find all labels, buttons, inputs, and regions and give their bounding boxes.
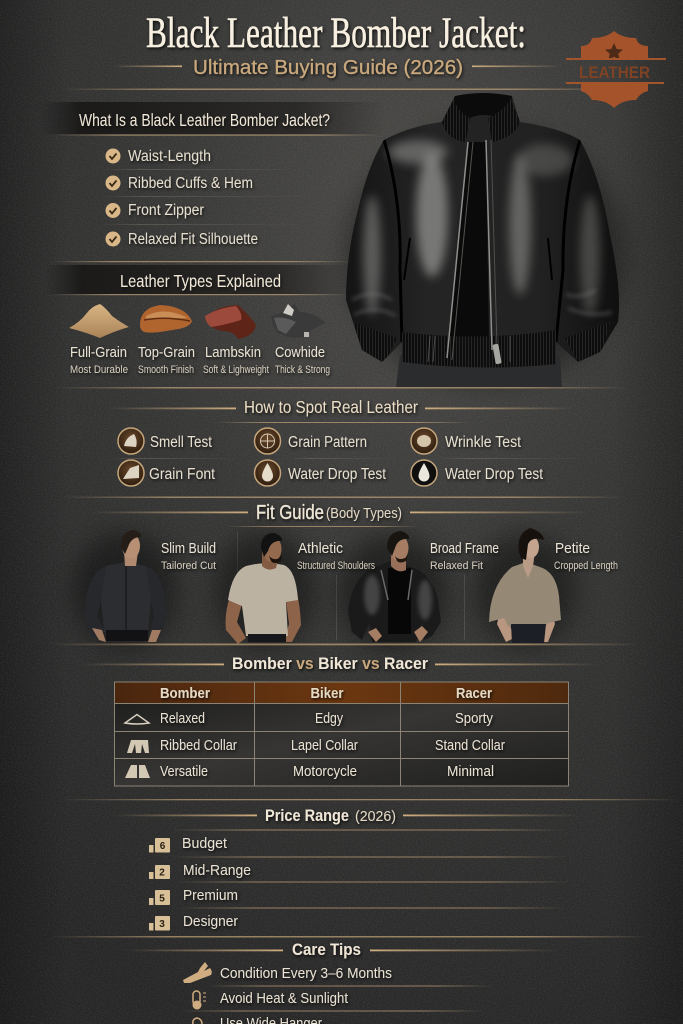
title: Black Leather Bomber Jacket: (146, 10, 526, 57)
list: features (100, 148, 310, 248)
icon: price tag 5 (149, 890, 170, 905)
icon: smell test (118, 428, 144, 454)
list: features: Waist-Length (128, 148, 211, 165)
labels: leather types: Cowhide (275, 344, 325, 361)
heading: leather types: Leather Types Explained (120, 271, 281, 291)
icon: thermometer (192, 991, 206, 1010)
table text: Bomber (160, 686, 210, 702)
labels: leather types (70, 344, 330, 376)
heading: fit guide: (Body Types) (326, 505, 402, 522)
icon: biker jacket (125, 765, 150, 778)
labels: body types: Cropped Length (554, 560, 618, 572)
badge: leather (566, 31, 666, 108)
labels: leather types: Top-Grain (138, 344, 195, 361)
icon: full-grain (69, 304, 129, 338)
labels: price tiers (182, 836, 251, 930)
list: features: Front Zipper (128, 202, 204, 219)
icon: price tag 5: 5 (159, 894, 165, 904)
labels: price tiers: Premium (183, 888, 238, 904)
labels: price tiers: Mid-Range (183, 863, 251, 879)
heading: fit guide (90, 502, 590, 527)
table text: Racer (456, 686, 492, 702)
heading: spot real leather: How to Spot Real Leather (244, 397, 418, 417)
table text: Motorcycle (293, 764, 357, 780)
icon: hanger (125, 714, 149, 724)
heading: comparison: Bomber vs Biker vs Racer (232, 654, 428, 673)
labels: tests: Water Drop Test (288, 466, 387, 483)
labels: tests (149, 434, 544, 483)
labels: body types: Relaxed Fit (430, 560, 483, 572)
panel: leather types (45, 261, 355, 376)
table text: Biker (310, 686, 344, 702)
icon: conditioning brush (183, 962, 212, 983)
labels: tests: Wrinkle Test (445, 434, 522, 451)
icon: price tag 2: 2 (159, 868, 165, 878)
badge: leather: LEATHER (579, 63, 650, 82)
labels: body types (161, 541, 618, 572)
heading: fit guide: Fit Guide (256, 502, 324, 524)
labels: tests: Grain Font (149, 466, 216, 483)
heading: care tips: Care Tips (292, 940, 361, 959)
panel: how to spot real leather (108, 397, 588, 486)
icon: price tag 2 (149, 865, 170, 879)
table text: Relaxed (160, 711, 205, 727)
person: petite (475, 528, 575, 646)
table text: Edgy (315, 711, 344, 727)
labels: leather types: Thick & Strong (275, 364, 330, 376)
labels: body types: Broad Frame (430, 541, 499, 557)
labels: body types: Athletic (298, 541, 343, 557)
panel: price range (112, 806, 580, 930)
labels: leather types: Soft & Lighweight (203, 364, 269, 376)
table text: Lapel Collar (291, 738, 358, 754)
labels: leather types: Full-Grain (70, 344, 127, 361)
labels: price tiers: Budget (182, 836, 227, 852)
person: athletic (215, 532, 315, 648)
jacket image (346, 93, 619, 387)
labels: body types: Petite (555, 541, 590, 557)
table (114, 682, 568, 786)
labels: tests: Water Drop Test (445, 466, 544, 483)
labels: body types: Slim Build (161, 541, 216, 557)
table text: Ribbed Collar (160, 738, 237, 754)
icon: water drop (254, 460, 280, 486)
labels: leather types: Lambskin (205, 344, 261, 361)
person: slim build (73, 530, 177, 648)
labels: body types: Tailored Cut (161, 560, 216, 572)
heading: price range: Price Range (265, 806, 349, 825)
table text: Stand Collar (435, 738, 505, 754)
table text: Versatile (160, 764, 208, 780)
list: features: Ribbed Cuffs & Hem (128, 175, 253, 192)
icon: top-grain (140, 305, 192, 333)
labels: care tips (220, 966, 392, 1024)
icon: cowhide (271, 304, 326, 338)
person: broad frame (338, 531, 448, 650)
list: features: Relaxed Fit Silhouette (128, 231, 258, 248)
panel: fit guide (73, 502, 618, 650)
icon: price tag 3 (149, 916, 170, 930)
icon: water drop black (411, 460, 437, 486)
panel: what is a bomber jacket (40, 102, 385, 248)
labels: tests: Smell Test (150, 434, 213, 451)
icon: lambskin (205, 305, 256, 339)
icon: ribbed collar jacket (127, 740, 149, 753)
panel: care tips (125, 940, 560, 1024)
labels: leather types: Most Durable (70, 364, 128, 376)
labels: leather types: Smooth Finish (138, 364, 194, 376)
labels: price tiers: Designer (183, 914, 238, 930)
heading: price range (112, 806, 580, 830)
table text: Minimal (447, 764, 494, 780)
icon: price tag 6 (149, 838, 170, 852)
panel: comparison (80, 654, 600, 786)
icon: price tag 6: 6 (160, 841, 166, 852)
icon: price tag 3: 3 (159, 919, 165, 930)
heading: price range: (2026) (355, 809, 396, 825)
icon: wrinkle test (411, 428, 437, 454)
labels: tests: Grain Pattern (288, 434, 367, 451)
table text (160, 686, 505, 780)
icon: hanger hook (193, 1018, 202, 1024)
heading: what is: What Is a Black Leather Bomber Jacket? (79, 110, 330, 130)
icon: grain pattern (254, 428, 280, 454)
labels: body types: Structured Shoulders (297, 560, 375, 572)
subtitle: Ultimate Buying Guide (2026) (193, 57, 463, 79)
labels: care tips: Condition Every 3–6 Months (220, 966, 392, 982)
labels: care tips: Avoid Heat & Sunlight (220, 991, 348, 1007)
table text: Sporty (455, 711, 494, 727)
icon: grain font (118, 460, 144, 486)
